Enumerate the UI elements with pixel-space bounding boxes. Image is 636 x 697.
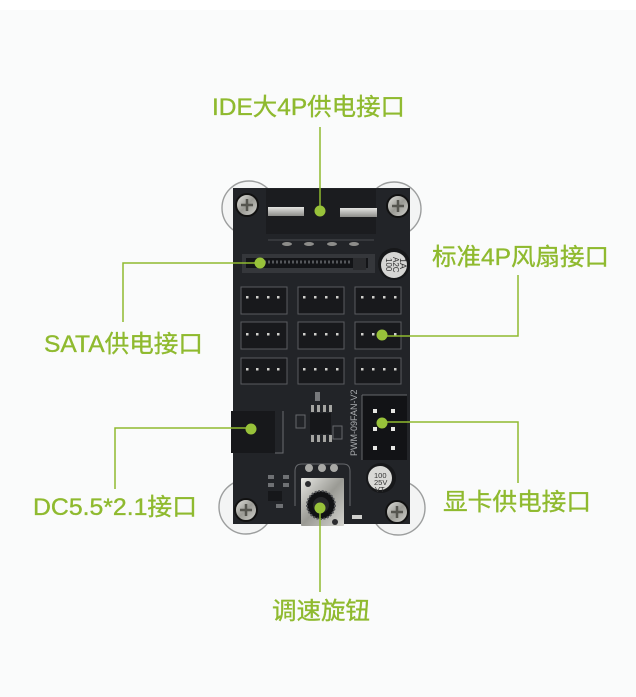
mounting screws xyxy=(235,194,409,523)
board model label: PWM-09FAN-V2 xyxy=(349,389,359,456)
fan headers xyxy=(241,287,401,384)
callout: GPU power xyxy=(376,418,591,516)
control chip xyxy=(296,392,342,442)
callout: standard 4P fan xyxy=(376,244,609,340)
capacitor top: A2C xyxy=(391,257,400,273)
capacitor top: 1A xyxy=(398,258,408,269)
callout: SATA power: SATA供电接口 xyxy=(44,331,203,358)
capacitor bottom: 25V xyxy=(374,478,387,487)
callout: IDE 4P power: IDE大4P供电接口 xyxy=(212,94,405,121)
capacitor top xyxy=(378,248,410,280)
IDE 4P connector xyxy=(266,189,377,246)
GPU power connector xyxy=(362,395,407,460)
callout: speed knob: 调速旋钮 xyxy=(272,598,370,625)
knob potentiometer xyxy=(295,464,350,526)
callout: speed knob xyxy=(272,502,370,625)
callout: DC 5.5*2.1: DC5.5*2.1接口 xyxy=(33,494,197,521)
callout: SATA power xyxy=(44,258,266,358)
suction feet xyxy=(219,181,425,535)
circuit board xyxy=(231,188,410,526)
small SMD parts xyxy=(268,475,362,519)
callout: GPU power: 显卡供电接口 xyxy=(443,489,591,516)
SATA connector xyxy=(242,254,375,273)
DC 5.5 jack xyxy=(231,411,283,453)
capacitor top: 100 xyxy=(384,258,393,272)
callout: standard 4P fan: 标准4P风扇接口 xyxy=(432,244,609,271)
fan header pins xyxy=(246,296,396,370)
capacitor bottom xyxy=(366,463,396,494)
capacitor bottom: 100 xyxy=(374,471,387,480)
callout: IDE 4P power xyxy=(212,94,405,216)
capacitor bottom: VT xyxy=(375,485,385,494)
callout: DC 5.5*2.1 xyxy=(33,424,256,521)
